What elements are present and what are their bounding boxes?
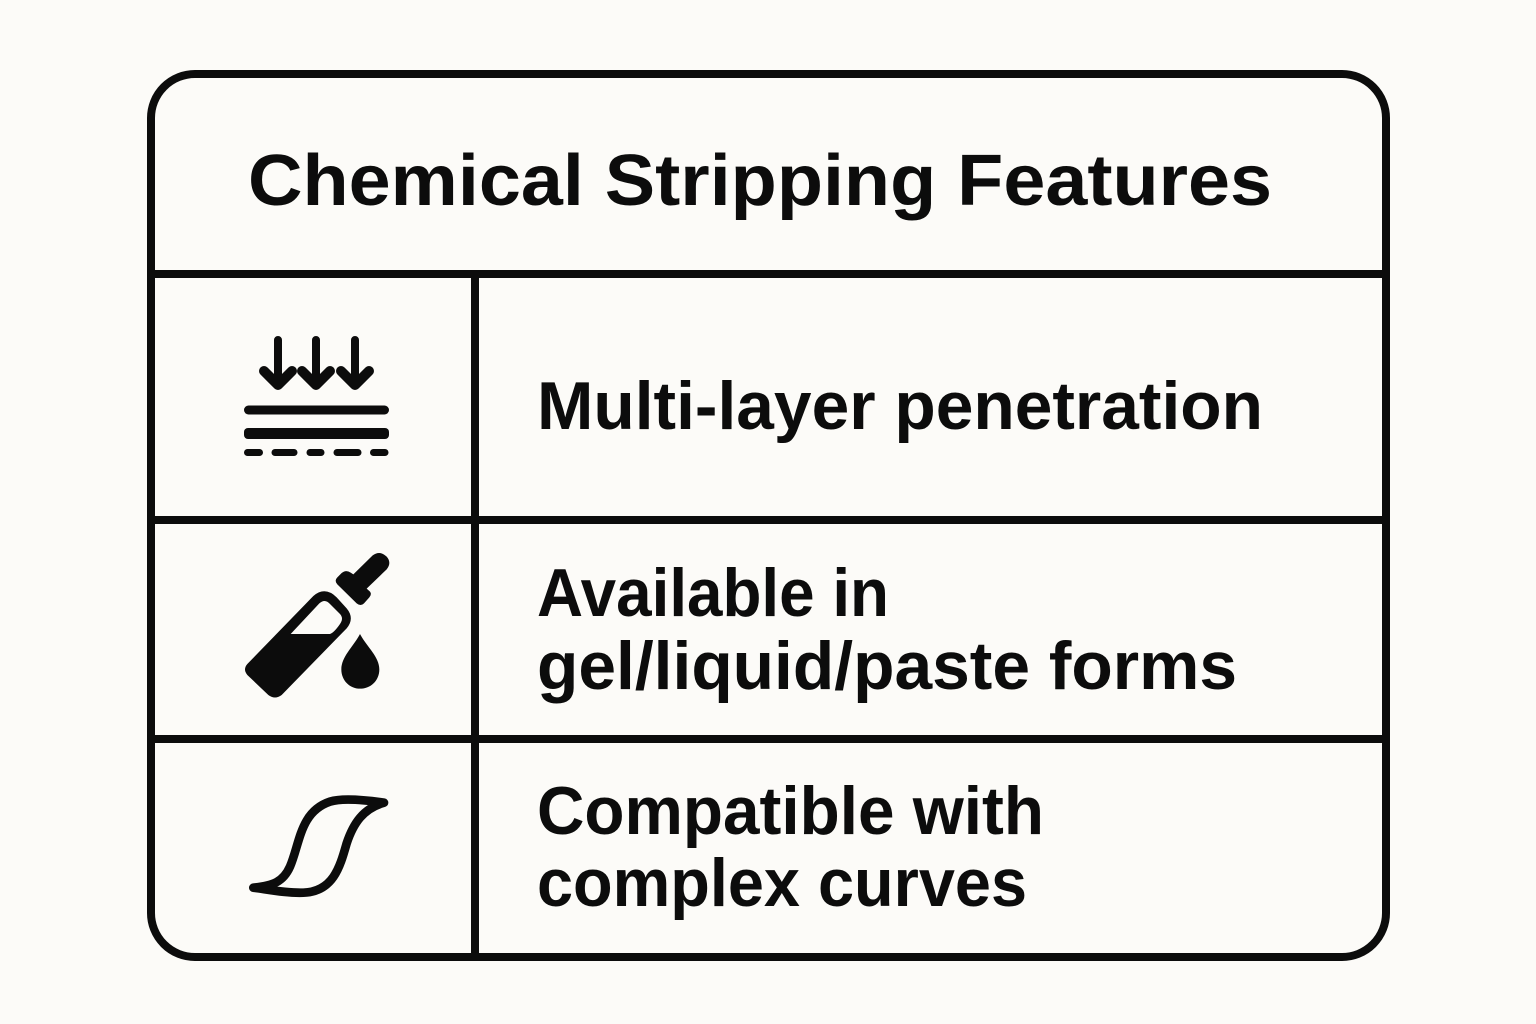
text: compatible curves: complex curves [537, 845, 1027, 921]
title: Chemical Stripping Features [248, 141, 1272, 221]
icon: dropper bottle and drop [245, 553, 389, 697]
icon: complex curve [253, 800, 384, 893]
text: compatible curves [537, 773, 1044, 921]
panel: features table [151, 74, 1386, 957]
text: available forms [537, 555, 1237, 704]
text: compatible curves: Compatible with [537, 773, 1044, 849]
text: available forms: Available in [537, 555, 889, 631]
icon: arrows penetrating layers [244, 340, 389, 452]
text: available forms: gel/liquid/paste forms [537, 628, 1237, 704]
text: multi-layer penetration: Multi-layer penetration [537, 368, 1263, 444]
